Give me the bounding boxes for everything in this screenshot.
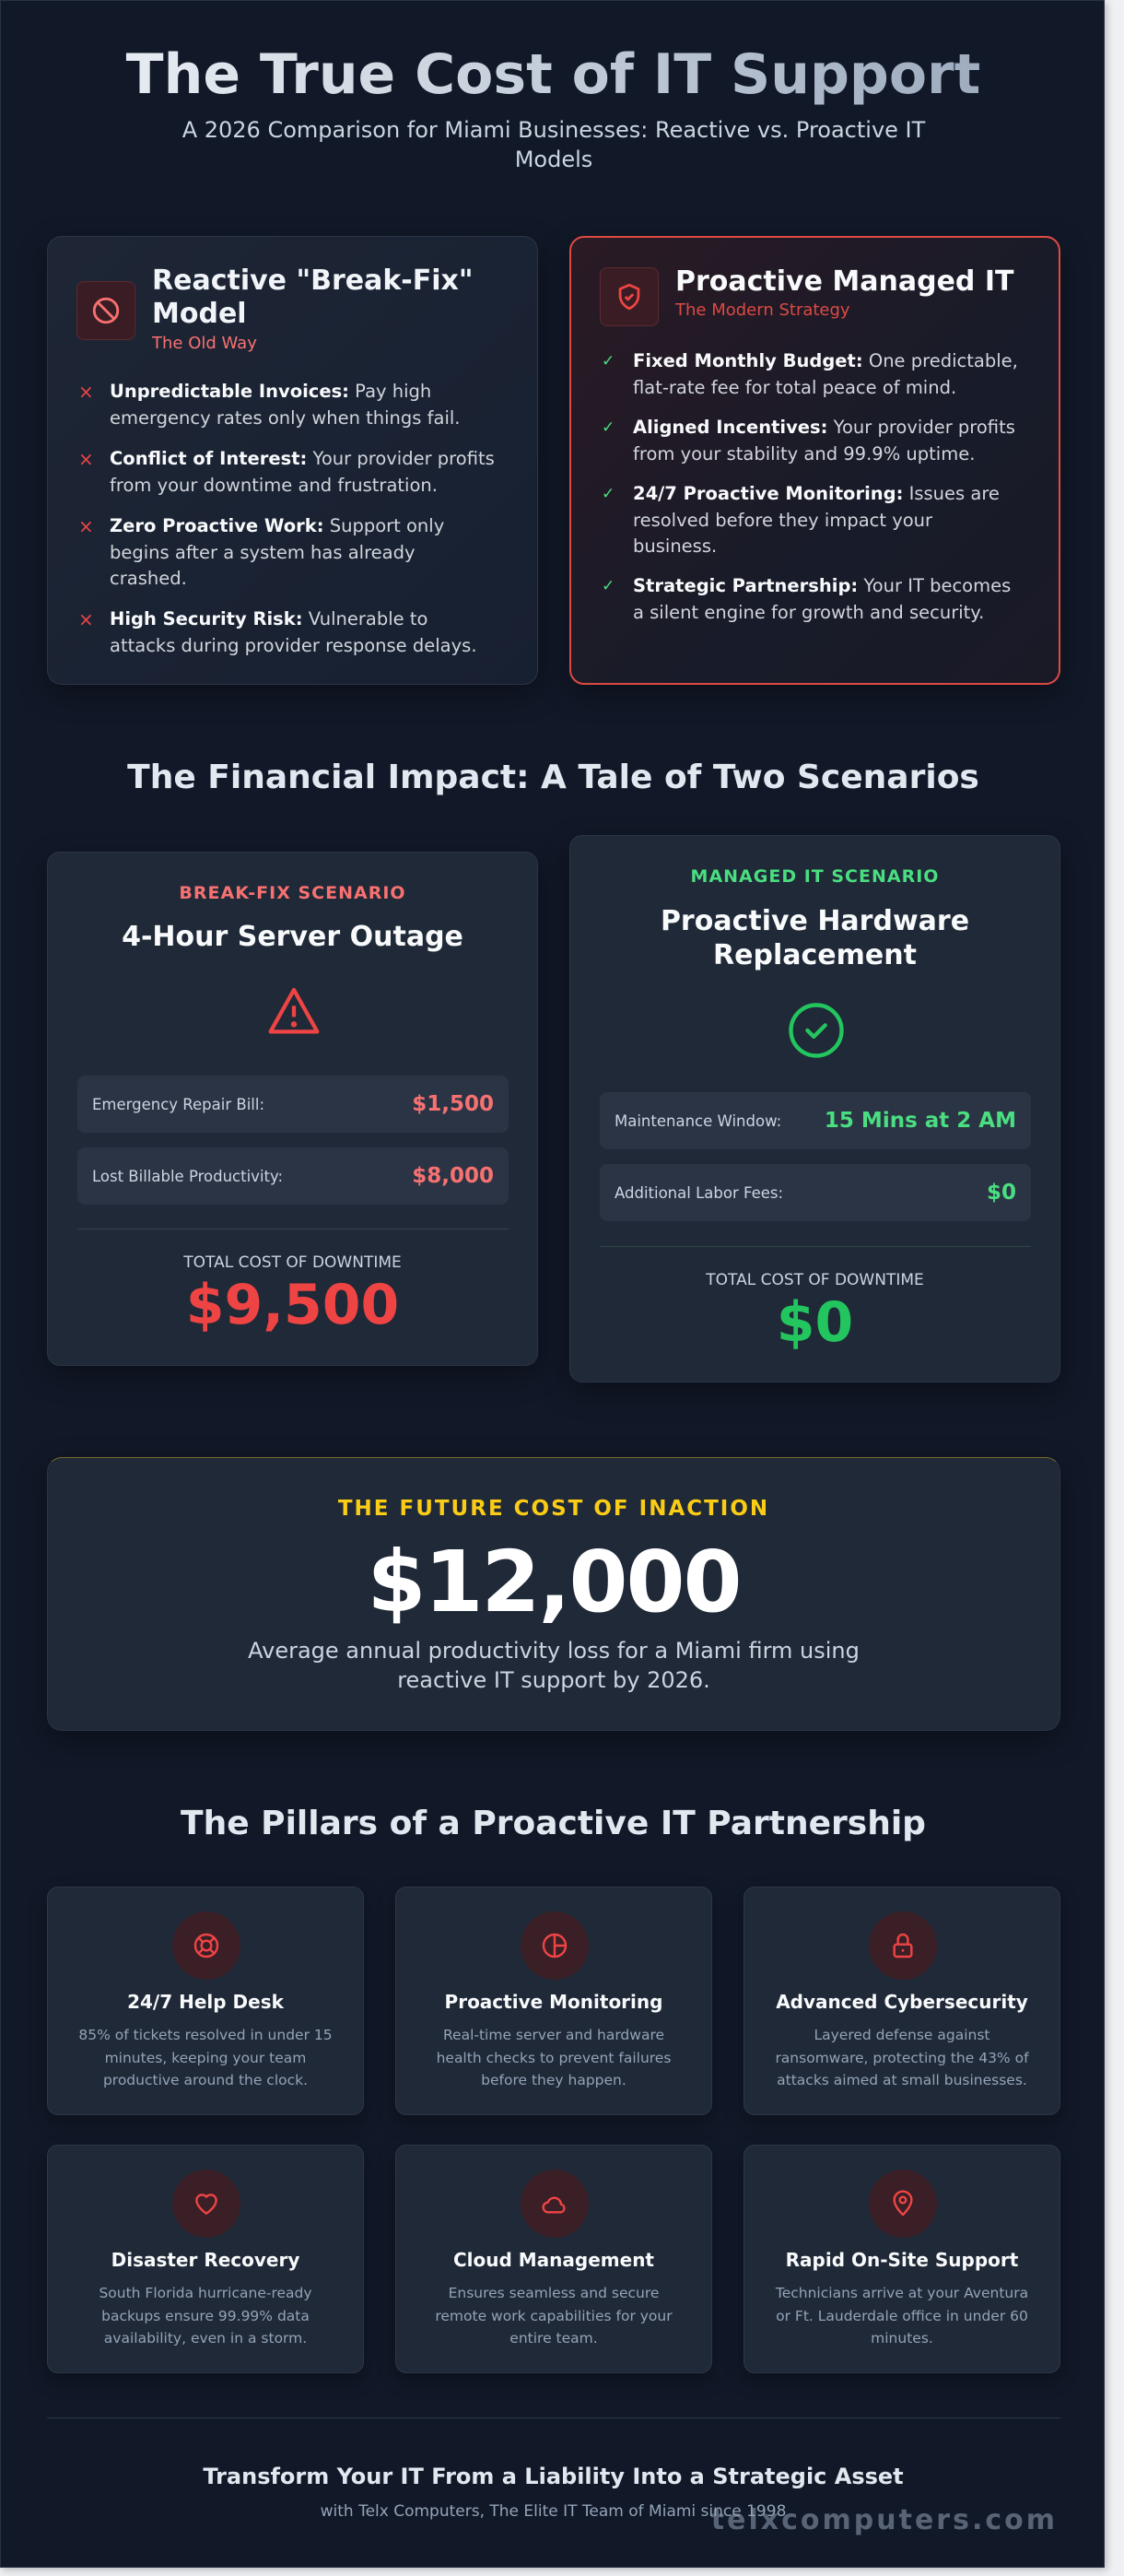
label: MANAGED IT SCENARIO — [691, 866, 939, 887]
icon: lock — [869, 1911, 937, 1980]
heading: proactive: The Modern Strategy — [675, 300, 850, 320]
row: labor fees: $0 — [987, 1181, 1016, 1205]
row: lost productivity: Lost Billable Productivity: — [92, 1167, 283, 1185]
list: reactive drawbacks: Conflict of Interest: Your provider profits from your downtime and frustration. — [110, 448, 495, 496]
title: The True Cost of IT Support — [126, 42, 980, 107]
heading: pillars: The Pillars of a Proactive IT Partnership — [181, 1805, 926, 1842]
panel: proactive model — [569, 236, 1060, 685]
heading: financial impact: The Financial Impact: A Tale of Two Scenarios — [127, 759, 979, 796]
list: proactive benefits: Fixed Monthly Budget: One predictable, flat-rate fee for total peace of mind. — [633, 350, 1018, 398]
title — [1, 36, 1106, 113]
scenario title: Replacement — [713, 939, 917, 971]
list: reactive drawbacks: Zero Proactive Work: Support only begins after a system has already crashed. — [110, 515, 444, 589]
panel: reactive model: × — [78, 515, 94, 537]
total cost: TOTAL COST OF DOWNTIME — [706, 1271, 924, 1289]
pillar: on-site — [743, 2145, 1060, 2373]
pillar: disaster recovery: Disaster Recovery — [111, 2249, 299, 2271]
pillar: help desk: 85% of tickets resolved in under 15 minutes, keeping your team productive around the clock. — [78, 2027, 333, 2088]
total cost: TOTAL COST OF DOWNTIME — [183, 1253, 402, 1272]
pillar: on-site: Rapid On-Site Support — [786, 2249, 1018, 2271]
pillar: help desk — [47, 1887, 364, 2115]
row: maintenance window: Maintenance Window: — [615, 1112, 781, 1130]
icon: life ring — [172, 1911, 240, 1980]
pillar: cloud: Cloud Management — [453, 2249, 654, 2271]
big number: $12,000 — [367, 1533, 741, 1631]
list: proactive benefits: Strategic Partnership: Your IT becomes a silent engine for growth and security. — [633, 575, 1011, 623]
panel: break-fix scenario — [47, 852, 538, 1366]
heading: reactive: The Old Way — [152, 334, 257, 353]
pillar: cloud: Ensures seamless and secure remote work capabilities for your entire team. — [435, 2285, 673, 2347]
icon: warning — [269, 988, 319, 1034]
panel: proactive model: ✓ — [602, 485, 615, 503]
list: reactive drawbacks — [78, 381, 495, 656]
panel: reactive model: × — [78, 448, 94, 470]
description: Average annual productivity loss for a Miami firm using reactive IT support by 2026. — [248, 1638, 860, 1693]
row: emergency repair — [77, 1076, 509, 1133]
icon: prohibited — [76, 281, 135, 340]
scenario title: Proactive Hardware — [661, 905, 969, 937]
footer subtext: with Telx Computers, The Elite IT Team of Miami since 1998 — [321, 2502, 786, 2521]
icon: map pin — [869, 2170, 937, 2238]
list: proactive benefits: Aligned Incentives: Your provider profits from your stability and 99.9% uptime. — [633, 417, 1015, 465]
row: maintenance window: 15 Mins at 2 AM — [825, 1109, 1016, 1133]
icon: heart — [172, 2170, 240, 2238]
panel: reactive model: × — [78, 608, 94, 630]
pillar: monitoring — [395, 1887, 712, 2115]
panel: proactive model: ✓ — [602, 577, 615, 595]
heading: proactive — [674, 265, 1013, 320]
panel: proactive model: ✓ — [602, 418, 615, 437]
list: proactive benefits: 24/7 Proactive Monitoring: Issues are resolved before they impact your business. — [633, 483, 1000, 557]
watermark: telxcomputers.com — [711, 2504, 1058, 2536]
heading: reactive: Reactive "Break-Fix" Model — [152, 265, 474, 330]
list: proactive benefits — [602, 350, 1018, 623]
panel: reactive model — [47, 236, 538, 685]
pillar: on-site: Technicians arrive at your Aventura or Ft. Lauderdale office in under 60 minutes. — [776, 2285, 1028, 2347]
pillar: help desk: 24/7 Help Desk — [127, 1991, 284, 2013]
heading: proactive: Proactive Managed IT — [675, 265, 1013, 298]
label: BREAK-FIX SCENARIO — [179, 883, 406, 903]
icon: check circle — [789, 1003, 844, 1058]
subtitle: A 2026 Comparison for Miami Businesses: Reactive vs. Proactive IT Models — [182, 117, 925, 172]
total cost — [706, 1271, 924, 1355]
pillar: disaster recovery — [47, 2145, 364, 2373]
total cost: $0 — [777, 1290, 853, 1355]
row: lost productivity — [77, 1147, 509, 1205]
label: THE FUTURE COST OF INACTION — [338, 1497, 769, 1521]
pillar: cybersecurity: Advanced Cybersecurity — [776, 1991, 1028, 2013]
panel: managed IT scenario — [569, 835, 1060, 1382]
scenario title — [661, 905, 969, 971]
icon: shield check — [600, 267, 659, 326]
panel: proactive model: ✓ — [602, 352, 615, 371]
list: reactive drawbacks: Unpredictable Invoices: Pay high emergency rates only when things fail. — [110, 381, 461, 428]
pillar: cloud — [395, 2145, 712, 2373]
pillar: cybersecurity: Layered defense against ransomware, protecting the 43% of attacks aimed at small businesses. — [775, 2027, 1029, 2088]
list: reactive drawbacks: High Security Risk: Vulnerable to attacks during provider response delays. — [110, 608, 477, 656]
pillar: cybersecurity — [743, 1887, 1060, 2115]
panel: reactive model: × — [78, 381, 94, 403]
callout: future cost of inaction — [47, 1457, 1060, 1731]
icon: cloud — [521, 2170, 589, 2238]
icon: pie chart — [521, 1911, 589, 1980]
row: maintenance window — [600, 1092, 1031, 1149]
row: labor fees — [600, 1164, 1031, 1221]
total cost: $9,500 — [186, 1273, 399, 1337]
pillar: disaster recovery: South Florida hurricane-ready backups ensure 99.99% data availability, even in a storm. — [99, 2285, 312, 2347]
row: labor fees: Additional Labor Fees: — [615, 1183, 783, 1202]
row: lost productivity: $8,000 — [412, 1164, 494, 1188]
scenario title: 4-Hour Server Outage — [122, 921, 463, 953]
row: emergency repair: Emergency Repair Bill: — [92, 1095, 264, 1113]
row: emergency repair: $1,500 — [412, 1092, 494, 1116]
pillar: monitoring: Proactive Monitoring — [445, 1991, 662, 2013]
footer heading: Transform Your IT From a Liability Into a Strategic Asset — [203, 2464, 904, 2489]
pillar: monitoring: Real-time server and hardware health checks to prevent failures before they happen. — [437, 2027, 671, 2088]
